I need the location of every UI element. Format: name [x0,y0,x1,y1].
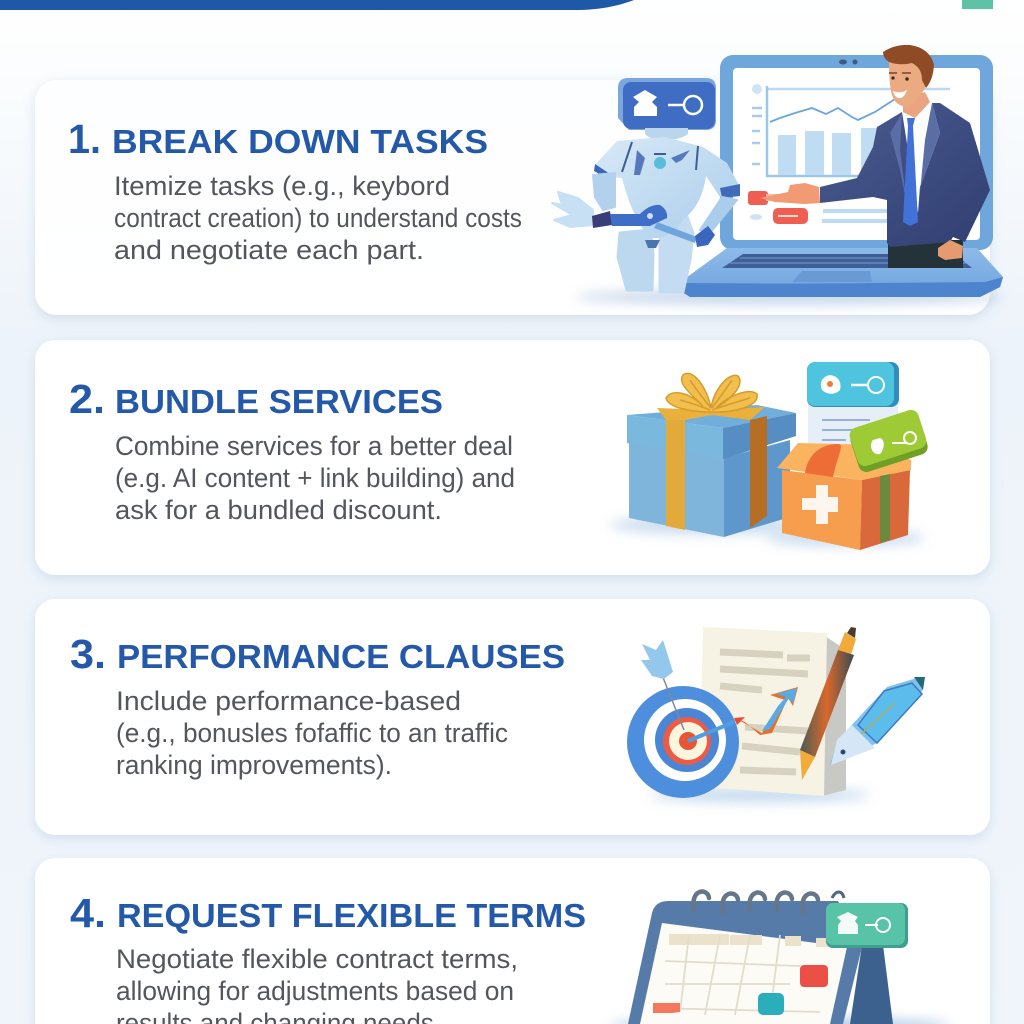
illustration: pencil [800,627,856,780]
illustration: blue gift box [610,373,810,537]
illustration: presenter in suit [760,45,990,268]
heading: 1: 1. [68,116,101,162]
body text 3: (e.g., bonusles fofaffic to an traffic [116,718,508,748]
illustration: robot [552,78,740,292]
heading: 3: PERFORMANCE CLAUSES [117,638,565,675]
panel: break down tasks [35,45,1005,315]
body text 1: and negotiate each part. [114,235,424,265]
body text 2: ask for a bundled discount. [115,495,442,525]
body text 2 [115,431,515,525]
body text 1 [114,171,522,265]
heading: 2: 2. [69,376,105,422]
body text 3 [116,686,508,780]
heading: 3: 3. [70,631,106,677]
body text 4: Negotiate flexible contract terms, [116,944,518,974]
heading: 1: BREAK DOWN TASKS [112,123,488,160]
card background [35,858,990,1024]
body text 3: ranking improvements). [116,750,392,780]
illustration: teal tag [826,903,908,948]
illustration: target [627,640,745,798]
illustration: orange box [765,408,930,550]
panel: request flexible terms [35,858,990,1024]
body text 4: allowing for adjustments based on [116,976,514,1006]
heading: 2 [69,376,443,422]
heading: 1 [68,116,488,162]
illustration: document and blue tag [807,362,899,460]
card background [35,340,990,575]
body text 3: Include performance-based [116,686,461,716]
card background [35,80,990,315]
body text 1: contract creation) to understand costs [114,203,522,233]
heading: 3 [70,631,565,677]
top teal tab [962,0,993,9]
illustration: blue pen [830,677,925,765]
card background [35,599,990,835]
illustration: laptop with chart [575,55,1005,304]
body text 2: (e.g. AI content + link building) and [115,463,515,493]
illustration: document with arrow [650,627,870,802]
panel: performance clauses [35,599,990,835]
heading: 4: REQUEST FLEXIBLE TERMS [117,897,586,934]
illustration: desk calendar [610,892,950,1024]
panel: bundle services [35,340,990,575]
heading: 4: 4. [70,890,106,936]
top banner [0,0,634,10]
body text 4 [116,944,518,1024]
heading: 2: BUNDLE SERVICES [115,383,443,420]
body text 2: Combine services for a better deal [115,431,513,461]
body text 1: Itemize tasks (e.g., keybord [114,171,450,201]
